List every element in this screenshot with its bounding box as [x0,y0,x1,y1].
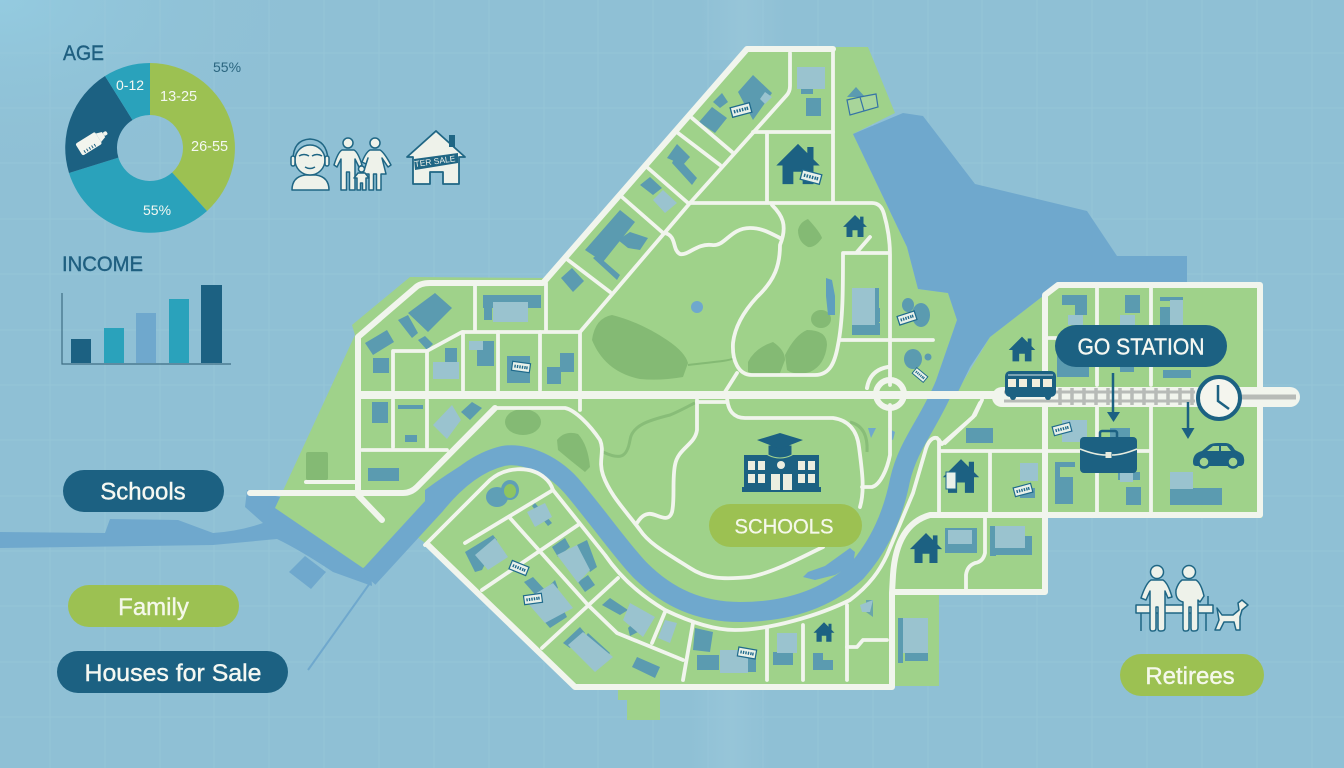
legend pill: Houses for Sale [57,651,288,693]
label: SCHOOLS on the map: SCHOOLS [734,516,834,538]
icon: school with graduation cap [742,433,821,492]
roads [250,49,1260,687]
icon: family [334,138,391,190]
legend pill: Retirees [1120,654,1264,696]
chart: income bars [62,285,231,364]
arrow: station to car [1182,402,1194,439]
water: bay [853,113,1187,392]
chart: age donut [65,63,235,233]
icon: house for sale [407,131,465,184]
icon: briefcase [1080,431,1137,473]
building footprints [365,67,1222,678]
icon: house for sale: TER SALE [414,153,456,169]
for-sale signs on the map [509,103,1072,659]
icon: clock [1198,377,1240,419]
ponds and green park areas [306,219,895,580]
water: western channel [0,490,372,670]
chart: age donut: 0-12 [116,77,144,93]
chart: age donut: 55% [143,202,171,218]
roundabout [867,367,904,408]
callout: GO STATION: GO STATION [1078,334,1204,360]
icon: person with headphones [291,139,329,190]
legend pill: Houses for Sale: Houses for Sale [84,660,262,687]
icon: retirees on a bench with dog [1136,566,1248,631]
chart: age donut: 13-25 [160,89,197,105]
arrow: station to briefcase [1107,373,1120,422]
rail line [1002,388,1296,405]
chart: age donut: 26-55 [191,139,228,155]
icon: bus [1005,371,1056,400]
callout: GO STATION [1055,325,1227,367]
land [275,47,1262,720]
icon: baby bottle [75,126,111,156]
small houses on the map [776,94,1035,642]
heading: AGE: AGE [63,42,104,65]
main avenue [357,391,1002,399]
legend pill: Family: Family [118,594,189,621]
label: SCHOOLS on the map [709,504,862,547]
legend pill: Retirees: Retirees [1145,663,1235,690]
legend pill: Schools: Schools [100,478,186,506]
icon: car [1193,443,1244,468]
label: 55%: 55% [213,59,241,75]
legend pill: Family [68,585,239,627]
legend pill: Schools [63,470,224,512]
water: river [368,385,945,612]
heading: INCOME: INCOME [62,253,143,276]
